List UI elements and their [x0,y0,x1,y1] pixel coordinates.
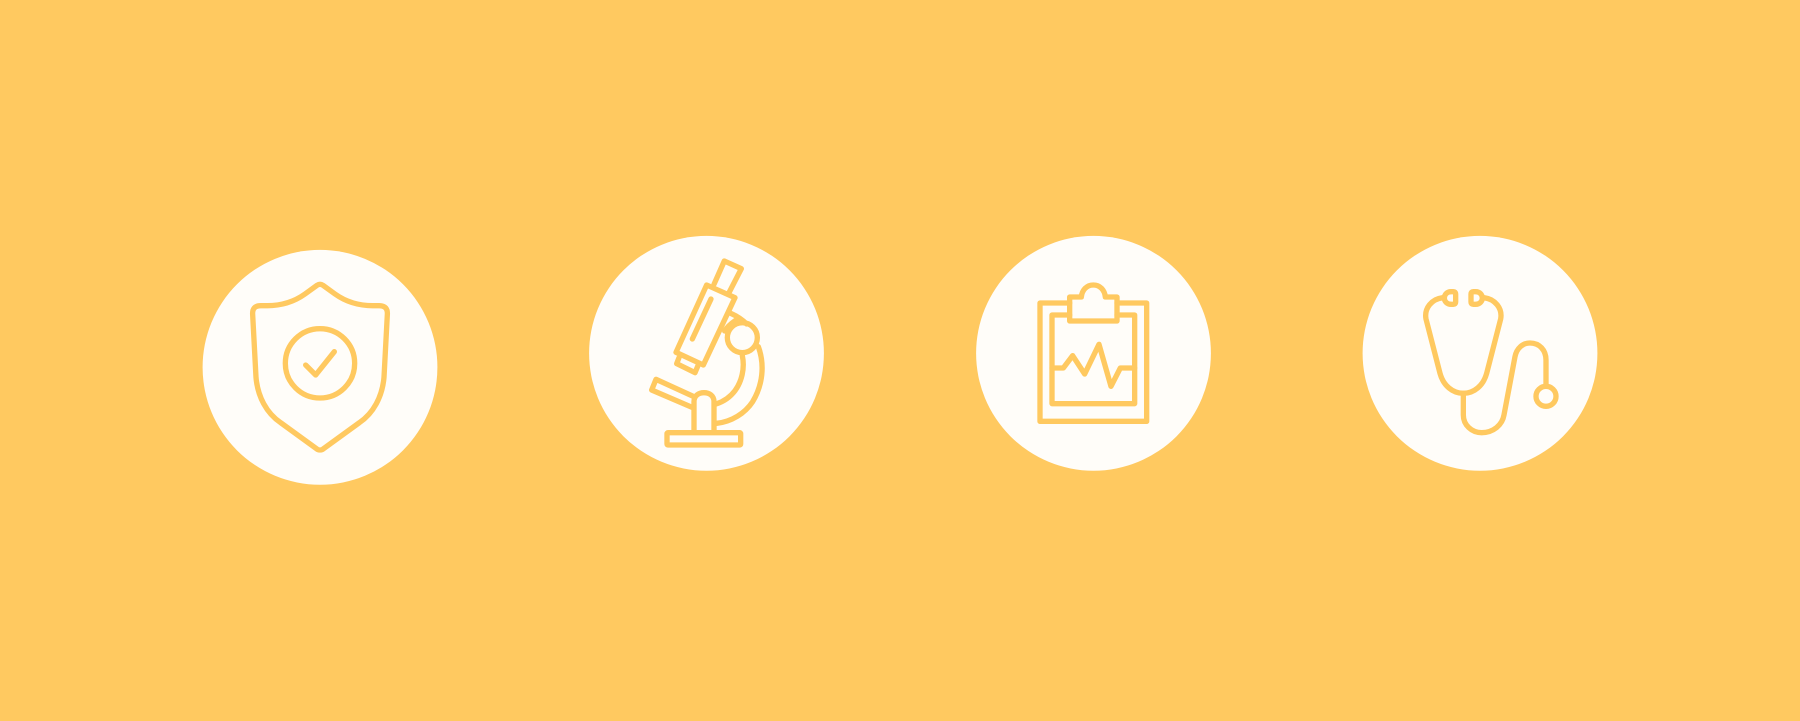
clipboard sheet [1052,315,1135,404]
icon: microscope [589,236,824,471]
post [694,393,714,432]
right ear tip [1471,292,1482,304]
focus knob [727,323,757,353]
clipboard clip [1070,285,1117,321]
chest piece [1536,386,1556,406]
clipboard board [1040,303,1147,421]
objective lens [677,358,699,373]
pulse line [1052,344,1135,386]
left ear tip [1444,292,1456,304]
check badge [285,329,355,398]
stage [652,379,694,407]
icon: clipboard with pulse graph [976,236,1211,471]
headset tubes [1426,298,1501,393]
base [667,433,741,445]
eyepiece [714,261,741,293]
arm [716,313,762,423]
shield outline [253,284,387,450]
icon: stethoscope [1363,236,1597,471]
icon: shield with check [203,250,437,485]
microscope tube [676,285,735,365]
main tube [1463,343,1546,433]
